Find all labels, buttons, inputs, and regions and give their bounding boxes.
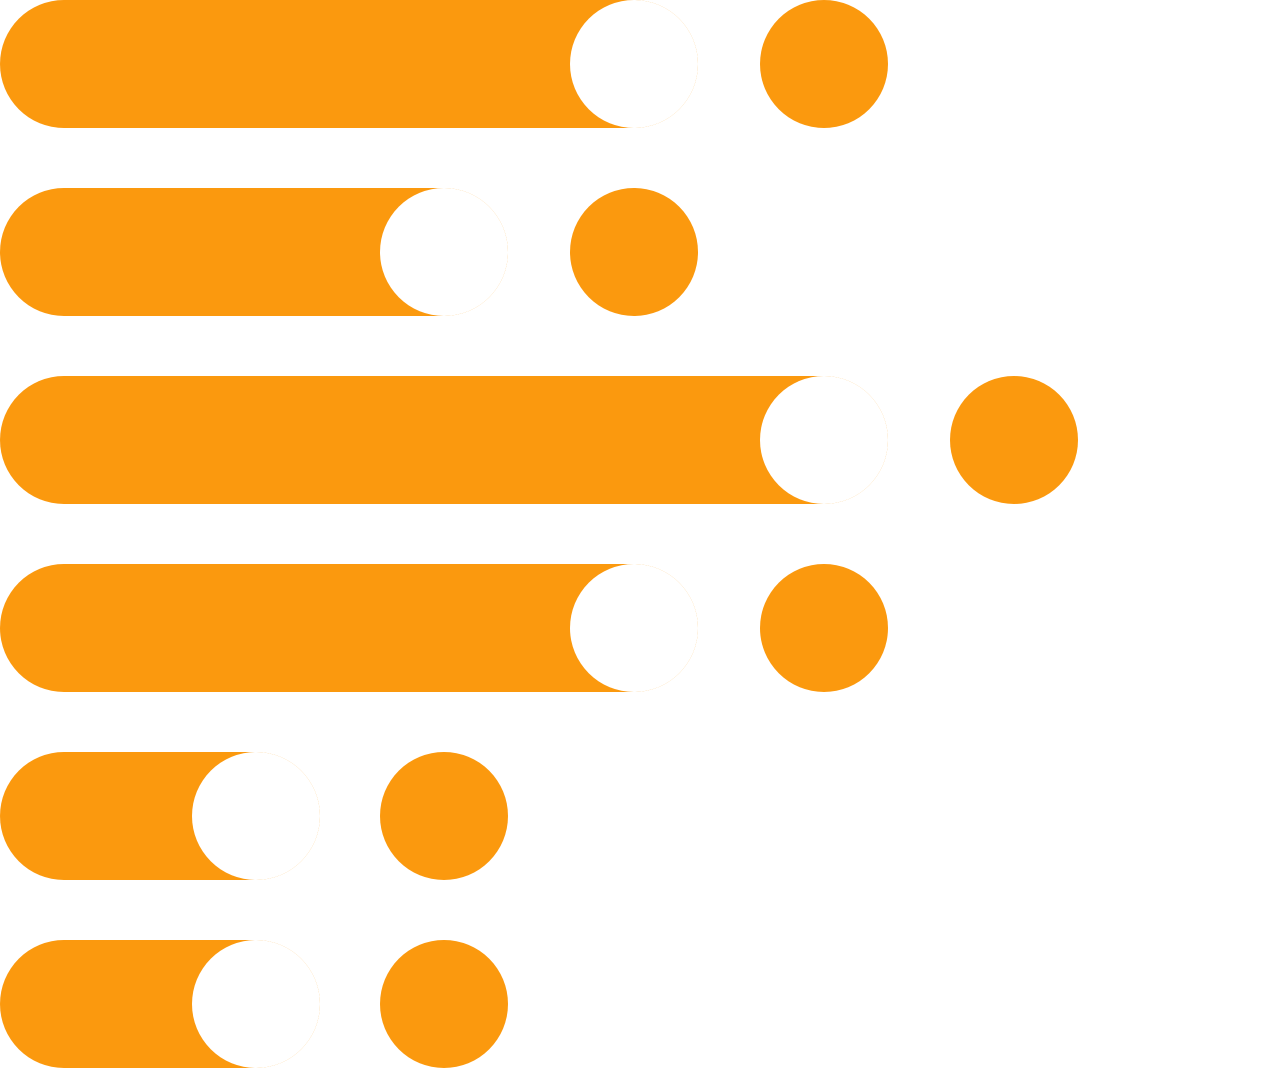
- bar 2 white knob: [380, 188, 508, 316]
- row 5: [0, 752, 508, 880]
- bar 4: [0, 564, 698, 692]
- bar 6 white knob: [192, 940, 320, 1068]
- bar 5 white knob: [192, 752, 320, 880]
- dot 3: [950, 376, 1078, 504]
- bar 6: [0, 940, 320, 1068]
- dot 1: [760, 0, 888, 128]
- bar 1: [0, 0, 698, 128]
- bar 2: [0, 188, 508, 316]
- bar 5: [0, 752, 320, 880]
- row 2: [0, 188, 698, 316]
- dot 2: [570, 188, 698, 316]
- dot 4: [760, 564, 888, 692]
- row 3: [0, 376, 1078, 504]
- row 1: [0, 0, 888, 128]
- bar 1 white knob: [570, 0, 698, 128]
- row 6: [0, 940, 508, 1068]
- dot 6: [380, 940, 508, 1068]
- row 4: [0, 564, 888, 692]
- dot 5: [380, 752, 508, 880]
- bar 4 white knob: [570, 564, 698, 692]
- bar 3 white knob: [760, 376, 888, 504]
- bar 3: [0, 376, 888, 504]
